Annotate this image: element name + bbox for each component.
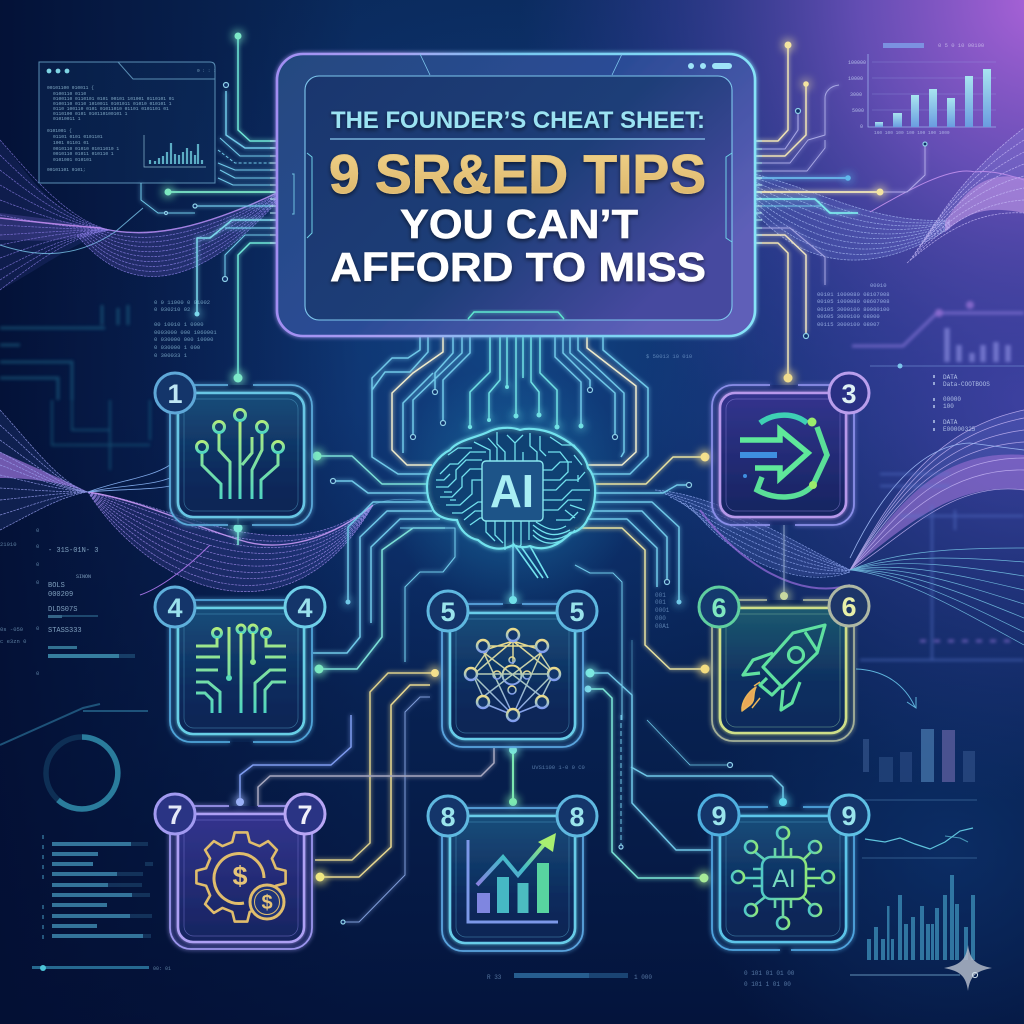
badge 3 xyxy=(829,373,869,413)
data text rows right of screen: 00115 3000100 08007 xyxy=(817,321,880,328)
chart: bar chart top-right: 100000 xyxy=(848,60,866,66)
badge 5 right xyxy=(557,591,597,631)
data text lower-left: DLDS07S xyxy=(48,606,77,614)
card 1 xyxy=(155,373,312,525)
data text lower-left: 0 xyxy=(36,579,39,586)
chart: donut lower-left xyxy=(46,737,118,809)
data labels right of card 3: 00000 xyxy=(943,396,961,403)
bottom tiny data: 00A1 xyxy=(655,623,670,630)
data text left of card 1: 0003000 000 1060001 xyxy=(154,329,217,336)
card 4 xyxy=(155,587,325,742)
chart: bar chart top-right: 160 100 100 100 100 100 1000 xyxy=(874,130,950,136)
badge 1 xyxy=(155,373,195,413)
flowing wave top-left xyxy=(0,140,283,290)
dim circuit shapes left xyxy=(0,305,150,470)
glowing dots xyxy=(164,32,884,882)
panel: terminal top-left xyxy=(39,62,216,183)
badge 7 left: 7 xyxy=(167,800,183,830)
bottom tiny data: 001 xyxy=(655,599,666,606)
icon: AI chip xyxy=(732,827,834,929)
flowing wave mid-right xyxy=(655,410,1024,645)
data text rows right of screen: 00605 3000100 08000 xyxy=(817,313,880,320)
data text lower-left: c e3zn 0 xyxy=(0,638,26,645)
badge 8 left xyxy=(428,796,468,836)
AI chip label: AI xyxy=(490,465,534,517)
brain with AI chip xyxy=(427,428,595,578)
icon: arrow cycle xyxy=(740,415,827,497)
panel: terminal top-left: 01010011 1 xyxy=(53,116,81,122)
badge 5 left: 5 xyxy=(440,597,456,627)
data text left of card 1: 0 030000 1 000 xyxy=(154,344,200,351)
bottom tiny data xyxy=(487,353,795,988)
panel: terminal top-left: 00101100 010011 { xyxy=(47,85,94,91)
badge 9 left xyxy=(699,795,739,835)
data labels right of card 3: 100 xyxy=(943,403,954,410)
data text lower-left: 0 xyxy=(36,625,39,632)
data text lower-left: BOLS xyxy=(48,582,65,590)
data text left of card 1: 0 030210 02 xyxy=(154,306,190,313)
card 3 xyxy=(712,373,869,525)
panel: terminal top-left: 0100110 0110101 0101 00101 101001 0110101 01 xyxy=(53,96,175,102)
wires: left screen side xyxy=(141,36,283,378)
bottom tiny data: 0 101 01 01 00 xyxy=(744,970,795,977)
badge 6 right: 6 xyxy=(841,592,857,622)
chart: horizontal bars lower-left: 00: 01 xyxy=(153,966,171,972)
panel: terminal top-left: 0101001 010101 xyxy=(53,157,92,163)
comb lines on screen sides xyxy=(270,141,762,243)
wires: screen to brain xyxy=(372,337,648,474)
brain glow xyxy=(387,365,637,615)
panel: terminal top-left: 1001 01101 01 xyxy=(53,140,89,146)
card 5 xyxy=(428,591,597,747)
bottom tiny data: 000 xyxy=(655,615,666,622)
badge 7 right xyxy=(285,794,325,834)
icon: gear with dollars: $ xyxy=(261,892,273,914)
badge 7 right: 7 xyxy=(297,800,313,830)
chart: bar chart top-right: 5000 xyxy=(852,108,864,114)
data text rows right of screen: 00105 3000100 80080100 xyxy=(817,306,890,313)
data text left of card 1: 0 0 11000 0 01002 xyxy=(154,299,210,306)
main title screen xyxy=(277,54,755,336)
flowing wave top-right xyxy=(745,128,1024,263)
arrow from card 6 xyxy=(856,669,916,708)
data text lower-left: 0 xyxy=(36,543,39,550)
panel: terminal top-left: 01101 0101 0101101 xyxy=(53,134,103,140)
data labels right of card 3: E00000325 xyxy=(943,426,976,433)
badge 4 right: 4 xyxy=(297,593,313,623)
badge 8 right xyxy=(557,796,597,836)
chart: bar chart top-right xyxy=(848,42,996,136)
chart: line chart lower-right xyxy=(862,800,977,858)
card 8 xyxy=(428,796,597,951)
data text left of card 1: 0 300033 1 xyxy=(154,352,188,359)
badge 5 right: 5 xyxy=(569,597,585,627)
chart: bar chart top-right: 10000 xyxy=(848,76,863,82)
panel: terminal top-left: 00101101 0101; xyxy=(47,167,86,173)
data text lower-left: 21010 xyxy=(0,541,17,548)
bottom tiny data: R 33 xyxy=(487,974,502,981)
title line: kicker: THE FOUNDER’S CHEAT SHEET: xyxy=(331,107,705,134)
icon: gear with dollars xyxy=(196,832,286,922)
card 9 xyxy=(699,795,869,950)
badge 1: 1 xyxy=(167,379,183,409)
data text lower-left: 0 xyxy=(36,527,39,534)
data labels right of card 3 xyxy=(934,374,990,433)
data text left of card 1: 0 030000 000 10000 xyxy=(154,336,213,343)
badge 6 left xyxy=(699,587,739,627)
wires: left of brain xyxy=(313,456,455,669)
icon: gear with dollars: $ xyxy=(232,861,248,891)
data text lower-left xyxy=(0,527,135,677)
icon: circuit board xyxy=(196,625,286,713)
title line: afford to miss: AFFORD TO MISS xyxy=(330,244,706,290)
circuit lines xyxy=(141,36,925,922)
icon: network xyxy=(465,629,560,721)
panel: terminal top-left: 0101001 { xyxy=(47,128,72,134)
small circuit terminals xyxy=(164,82,927,924)
data text left of card 1: 00 10010 1 0000 xyxy=(154,321,204,328)
bottom tiny data: $ 50013 10 010 xyxy=(646,353,692,360)
flowing wave mid-left xyxy=(0,410,440,595)
badge 5 left xyxy=(428,591,468,631)
panel: terminal top-left: 0100110 0110 xyxy=(53,91,86,97)
badge 7 left xyxy=(155,794,195,834)
badge 4 left: 4 xyxy=(167,593,183,623)
data text rows right of screen xyxy=(817,282,890,328)
data text rows right of screen: 00101 1000080 08107008 xyxy=(817,291,890,298)
title line: you can't: YOU CAN’T xyxy=(400,201,638,247)
badge 9 right xyxy=(829,795,869,835)
icon: rocket xyxy=(742,625,825,711)
panel: terminal top-left: 0010110 01010 01011010 1 xyxy=(53,146,119,152)
panel: terminal top-left: 0 : : : xyxy=(197,68,216,74)
badge 3: 3 xyxy=(841,379,857,409)
data labels right of card 3: DATA xyxy=(943,374,958,381)
badge 4 left xyxy=(155,587,195,627)
data labels right of card 3: DATA xyxy=(943,419,958,426)
badge 6 right xyxy=(829,586,869,626)
chart: bars right of card 6 xyxy=(863,729,975,782)
panel: terminal top-left: 0110100 0101 010110100101 1 xyxy=(53,111,128,117)
data labels right of card 3: Data-COOTBOOS xyxy=(943,381,990,388)
chart: bar chart top-right: 0 5 0 10 00100 xyxy=(938,42,984,49)
panel: terminal top-left: 0100110 0110 1010011 0101011 01010 010101 1 xyxy=(53,101,172,107)
bottom tiny data: UVS1100 1-0 0 C0 xyxy=(532,764,585,771)
chart: bars lower-right xyxy=(867,875,975,960)
badge 8 left: 8 xyxy=(440,802,456,832)
badge 9 left: 9 xyxy=(711,801,727,831)
chart: bar chart top-right: 0 xyxy=(860,124,863,130)
bottom tiny data: 0001 xyxy=(655,607,670,614)
data text rows right of screen: 00010 xyxy=(870,282,887,289)
panel: terminal top-left: 0010110 01011 010110 1 xyxy=(53,151,114,157)
icon: AI chip: AI xyxy=(772,865,796,893)
data text lower-left: SINON xyxy=(76,574,91,580)
wires: lower section xyxy=(238,517,784,922)
bottom tiny data: 1 000 xyxy=(634,974,652,981)
wires: right of brain xyxy=(575,457,705,720)
bottom tiny data: 0 101 1 01 00 xyxy=(744,981,791,988)
badge 6 left: 6 xyxy=(711,593,727,623)
data text lower-left: 0 xyxy=(36,561,39,568)
dim line lower-left xyxy=(0,704,148,745)
screen frame xyxy=(277,54,755,336)
chart: horizontal bars lower-left xyxy=(32,835,171,972)
data text lower-left: STASS333 xyxy=(48,627,82,635)
data text lower-left: 0s -050 xyxy=(0,626,23,633)
data text left of card 1 xyxy=(154,299,217,359)
icon: circuit tree xyxy=(196,410,284,499)
badge 4 right xyxy=(285,587,325,627)
chart: dim line chart mid-right xyxy=(852,301,1024,368)
dim circuit lower right xyxy=(860,474,1024,660)
data text rows right of screen: 00105 1000080 08607008 xyxy=(817,298,890,305)
card 7 xyxy=(155,794,325,949)
data text lower-left: 000209 xyxy=(48,591,73,599)
badge 9 right: 9 xyxy=(841,801,857,831)
bottom tiny data: 001 xyxy=(655,592,666,599)
badge 8 right: 8 xyxy=(569,802,585,832)
title line: 9 SR&ED tips: 9 SR&ED TIPS xyxy=(329,143,706,205)
chart: bar chart top-right: 3000 xyxy=(850,92,862,98)
star mark bottom-right xyxy=(944,945,992,991)
card 6 xyxy=(699,586,869,741)
chart icon: rising bars xyxy=(468,833,558,922)
data text lower-left: - 31S-01N- 3 xyxy=(48,547,98,555)
panel: terminal top-left: 0110 100110 0101 01011010 01101 0101101 01 xyxy=(53,106,169,112)
data text lower-left: 0 xyxy=(36,670,39,677)
wires: right screen side xyxy=(745,45,925,378)
